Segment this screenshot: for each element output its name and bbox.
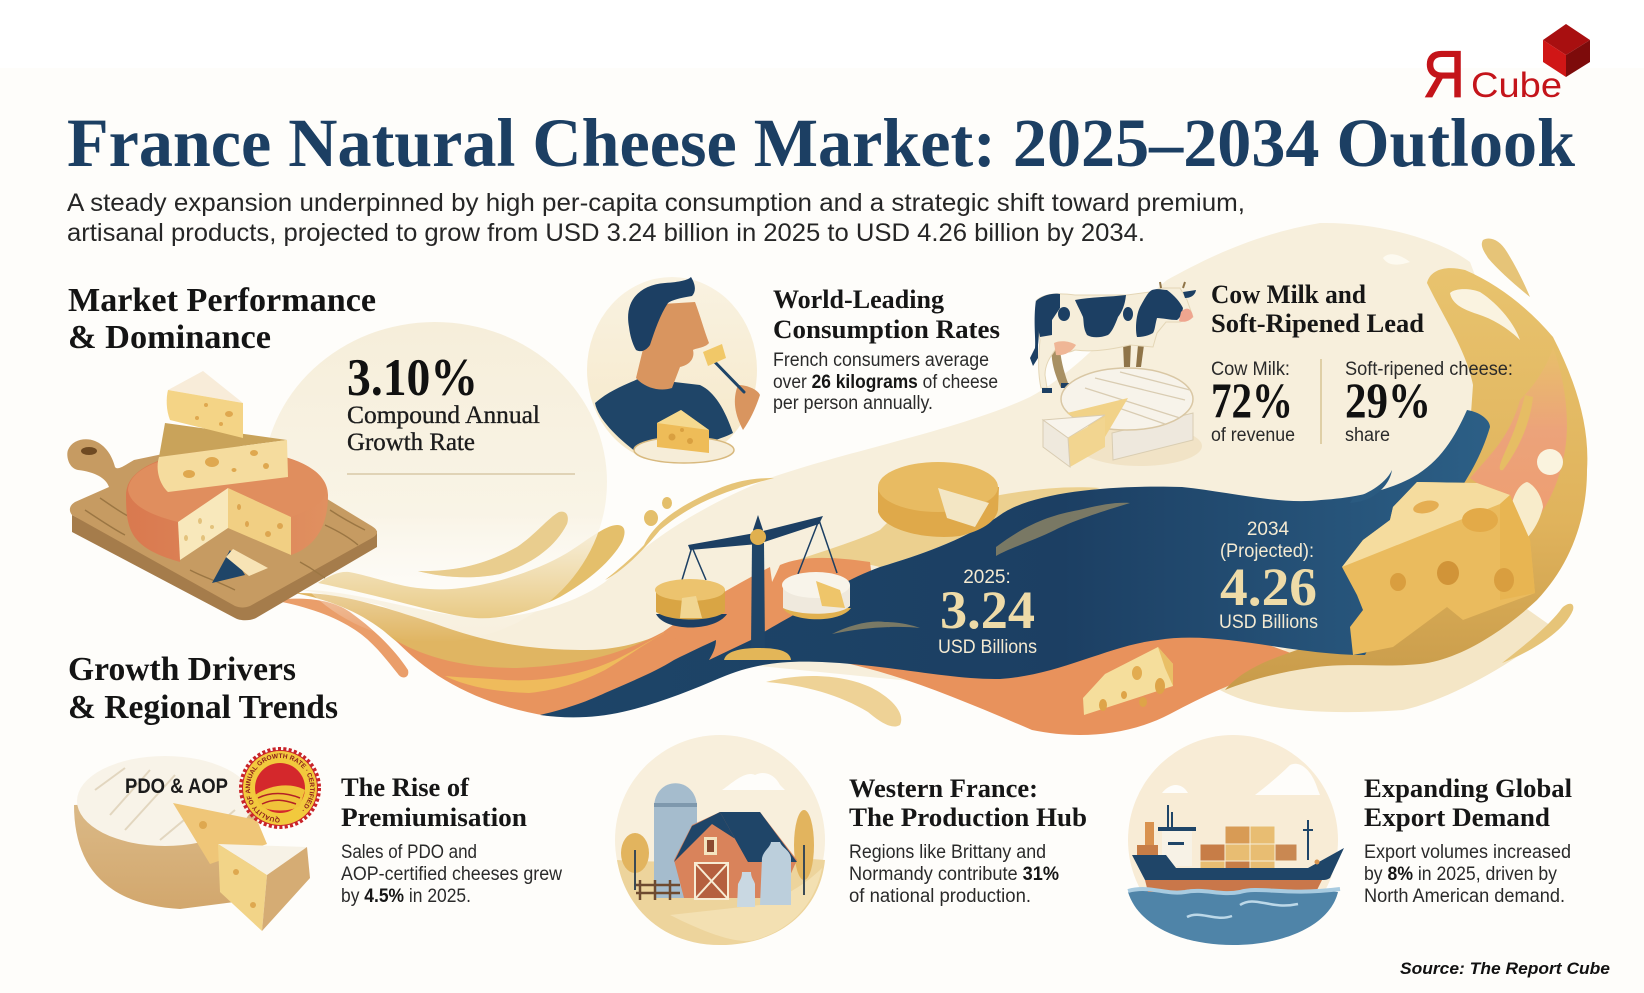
text block: premiumisation: Premiumisation	[341, 803, 528, 832]
superstructure	[1162, 830, 1192, 866]
lower-right cream	[1220, 590, 1554, 712]
hull	[1132, 848, 1344, 880]
plate	[634, 437, 734, 463]
source note: Source: The Report Cube	[1400, 959, 1610, 978]
stat: cow milk: of revenue	[1211, 425, 1295, 446]
small wedge on orange	[1083, 647, 1173, 715]
ear and horns	[1183, 290, 1196, 298]
text block: premiumisation	[341, 773, 562, 907]
text block: exports: by 8% in 2025, driven by	[1364, 864, 1557, 885]
stat: 2034: (Projected):	[1220, 541, 1314, 562]
hand	[735, 385, 760, 430]
stat: soft-ripened: share	[1345, 425, 1390, 446]
stat: cow milk: Cow Milk:	[1211, 359, 1290, 380]
orange drop	[272, 599, 408, 677]
icon circle: cargo ship	[1128, 735, 1344, 945]
icon: cow	[1030, 282, 1196, 393]
stat: cow milk: 72%	[1211, 372, 1293, 428]
subtitle	[67, 189, 1245, 247]
containers	[1200, 826, 1297, 875]
peach band	[1470, 347, 1567, 515]
text block: consumption	[773, 285, 1000, 414]
milk cans	[760, 842, 791, 905]
title: France Natural Cheese Market: 2025–2034 Outlook	[67, 105, 1576, 181]
heading: market performance: & Dominance	[68, 319, 271, 356]
icon: seal: QUALITY OF ANNUAL GROWTH RATE · CERTIFIED ·	[246, 753, 315, 822]
subtitle: A steady expansion underpinned by high per-capita consumption and a strategic shift toward premium,	[67, 189, 1245, 217]
cream dot	[1537, 449, 1563, 475]
tail	[1030, 300, 1040, 366]
icon: balance scale	[655, 515, 851, 660]
left pan	[656, 614, 727, 628]
icon circle: person eating cheese	[587, 277, 760, 463]
rump patch	[1037, 294, 1060, 337]
text block: exports: Export volumes increased	[1364, 842, 1571, 863]
body	[1036, 288, 1193, 388]
orange lower ribbon	[395, 558, 880, 716]
text block: premiumisation: by 4.5% in 2025.	[341, 886, 471, 907]
fork	[709, 356, 744, 392]
shirt	[595, 378, 733, 455]
icon circle: barn	[615, 735, 825, 945]
orange under navy	[800, 620, 1310, 735]
text block: premiumisation: The Rise of	[341, 773, 469, 802]
redraw flick over blob	[418, 512, 568, 577]
heading: market performance: Market Performance	[68, 282, 376, 319]
mid wedge	[159, 423, 287, 457]
text block: western france: of national production.	[849, 886, 1031, 907]
stat: 2025: 2025:	[963, 567, 1011, 588]
stat: 2034	[1219, 519, 1318, 633]
logo: RCube: Cube	[1471, 66, 1562, 105]
stat: CAGR: Growth Rate	[347, 429, 475, 456]
navy spike	[1350, 470, 1392, 503]
text block: western france: Normandy contribute 31%	[849, 864, 1059, 885]
stat: 2034: USD Billions	[1219, 612, 1318, 633]
stat: 2025: USD Billions	[938, 637, 1037, 658]
stat: CAGR: 3.10%	[347, 349, 478, 407]
text block: consumption: Consumption Rates	[773, 315, 1000, 344]
logo: RCube	[1423, 24, 1590, 111]
silo	[654, 783, 697, 898]
gold lower ribbon	[295, 593, 670, 688]
legs	[1123, 343, 1131, 367]
text block: exports: Expanding Global	[1364, 774, 1572, 803]
text block: cow milk heading: Cow Milk and	[1211, 280, 1367, 309]
text block: western france: Western France:	[849, 774, 1038, 803]
stat: 2034: 2034	[1247, 519, 1290, 540]
cheese bite	[703, 344, 726, 366]
text block: western france: Regions like Brittany and	[849, 842, 1046, 863]
red wheel	[126, 450, 328, 562]
cream petal	[1512, 482, 1543, 537]
face	[636, 302, 709, 390]
logo: RCube: Я	[1423, 37, 1465, 111]
navy stream	[540, 410, 1490, 717]
pdo label: PDO & AOP	[125, 775, 228, 798]
icon: camembert wheel	[1043, 368, 1202, 467]
flick right	[1502, 604, 1573, 663]
flick	[418, 512, 568, 577]
teardrop	[766, 676, 901, 727]
dots	[662, 497, 672, 509]
stat: CAGR	[347, 349, 575, 475]
text block: consumption: World-Leading	[773, 285, 944, 314]
stat: soft-ripened: Soft-ripened cheese:	[1345, 359, 1513, 380]
tree left	[621, 833, 649, 873]
icon: cheese wheel	[878, 462, 999, 537]
tree right	[794, 810, 814, 880]
heading: growth drivers	[68, 651, 338, 726]
cream backdrop swirl	[303, 223, 1560, 690]
text block: premiumisation: Sales of PDO and	[341, 842, 477, 863]
clouds	[1162, 785, 1188, 793]
text block: western france	[849, 774, 1087, 907]
text block: consumption: per person annually.	[773, 393, 933, 414]
snout	[1179, 309, 1193, 322]
top wedge	[168, 371, 243, 403]
text block: exports: Export Demand	[1364, 803, 1551, 832]
sand band behind wheel	[777, 487, 1100, 567]
hooves	[1042, 388, 1052, 393]
heading: growth drivers: & Regional Trends	[68, 689, 338, 726]
stat: 2034: 4.26	[1220, 557, 1317, 617]
cloud	[722, 773, 785, 790]
right pan	[783, 608, 851, 619]
heading: growth drivers: Growth Drivers	[68, 651, 296, 688]
text block: exports: North American demand.	[1364, 886, 1565, 907]
stat: cow milk	[1211, 359, 1295, 446]
waves	[1128, 889, 1340, 893]
barn	[674, 812, 797, 898]
stat: soft-ripened	[1345, 359, 1513, 446]
text block: premiumisation: AOP-certified cheeses grew	[341, 864, 562, 885]
stat: 2025: 3.24	[940, 580, 1035, 640]
fence	[636, 880, 680, 900]
hair	[628, 277, 695, 351]
front wedge	[218, 844, 307, 875]
gold side swirl	[1225, 268, 1587, 690]
gold streak	[605, 478, 774, 580]
white lens	[1383, 254, 1410, 265]
cream swoosh	[1450, 289, 1520, 340]
stat: CAGR: Compound Annual	[347, 402, 540, 429]
udder	[1054, 341, 1076, 355]
gold streaks on navy	[996, 503, 1130, 556]
plate cheese	[657, 410, 709, 453]
icon: cheese board	[67, 371, 377, 620]
top drop	[1482, 238, 1530, 297]
panel: growth wave	[272, 223, 1587, 735]
gold ribbon	[318, 525, 625, 618]
text block: western france: The Production Hub	[849, 803, 1087, 832]
heading: market performance	[68, 282, 376, 356]
text block: cow milk heading: Soft-Ripened Lead	[1211, 309, 1425, 338]
subtitle: artisanal products, projected to grow from USD 3.24 billion in 2025 to USD 4.26 billion by 2034.	[67, 219, 1145, 247]
board	[72, 515, 377, 620]
small blue wedge	[212, 550, 245, 583]
icon: big cheese	[1342, 482, 1535, 655]
stat: soft-ripened: 29%	[1345, 372, 1431, 428]
text block: consumption: French consumers average	[773, 350, 989, 371]
big patch	[1075, 295, 1126, 337]
text block: cow milk heading	[1211, 280, 1425, 338]
text block: exports	[1364, 774, 1572, 907]
head patch	[1136, 289, 1183, 337]
stat: 2025	[938, 567, 1037, 658]
orange fill behind scale	[663, 567, 780, 660]
icon: PDO AOP cheese	[74, 756, 310, 931]
panel: CAGR blob	[263, 322, 607, 642]
text block: consumption: over 26 kilograms of cheese	[773, 372, 998, 393]
thin gold stripe	[1500, 395, 1533, 470]
